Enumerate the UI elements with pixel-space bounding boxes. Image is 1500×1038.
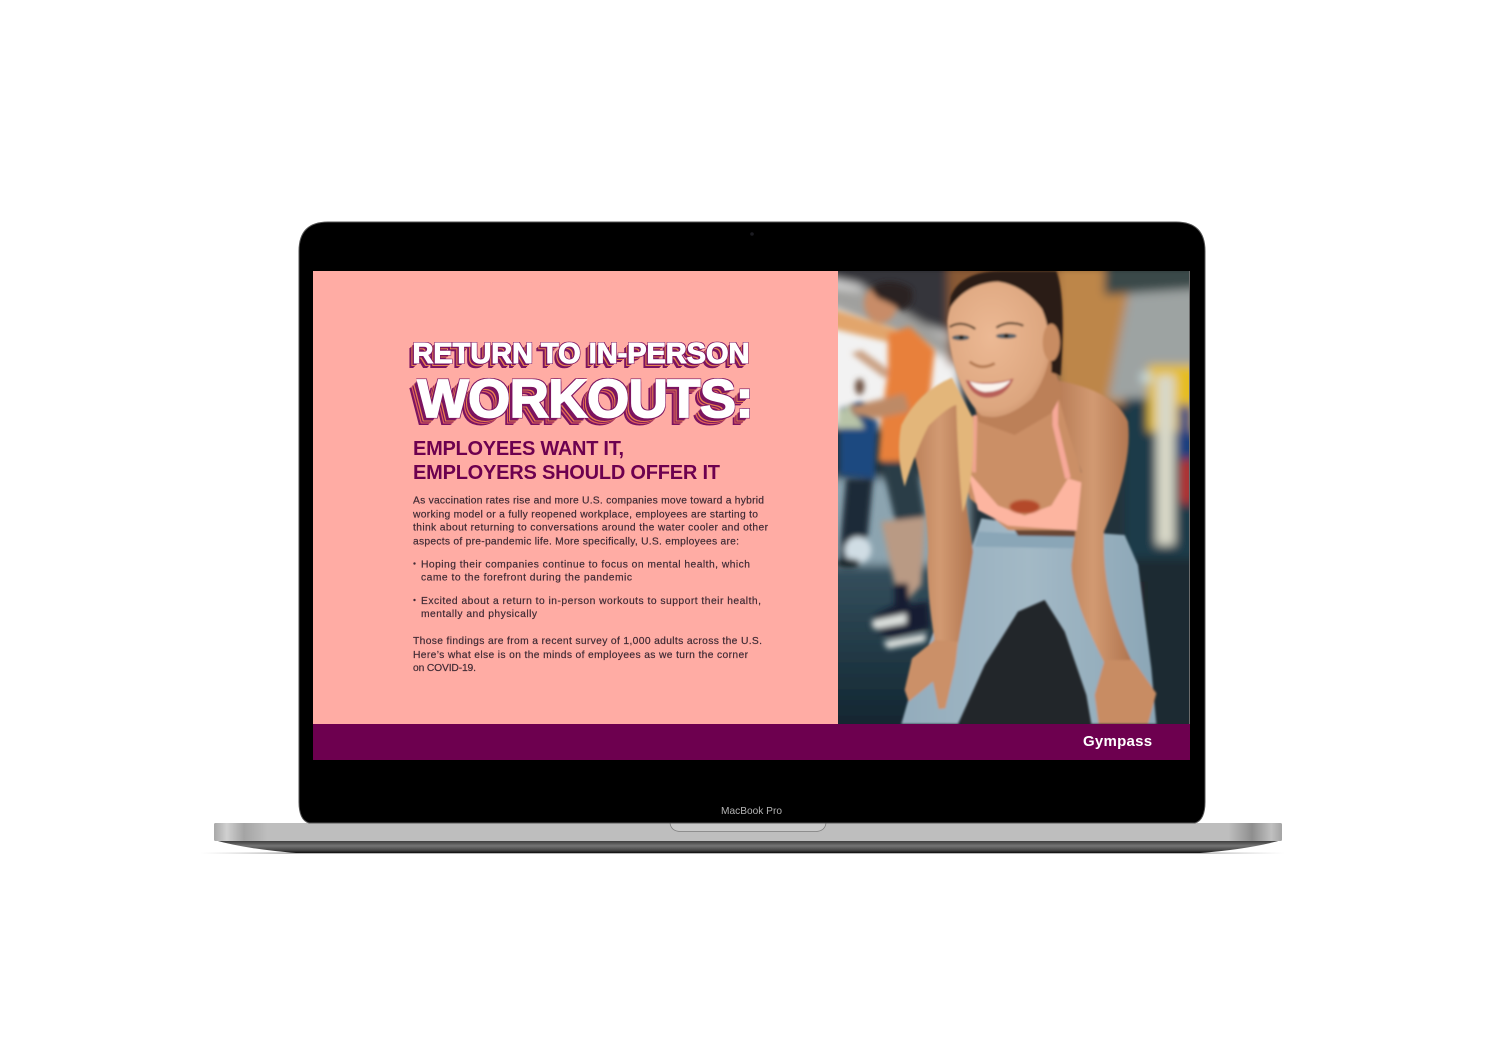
- closing paragraph: Those findings are from a recent survey of 1,000 adults across the U.S.: [413, 636, 762, 647]
- woman nose: [970, 362, 995, 367]
- photo far background person: [835, 379, 877, 568]
- photo blurred man in orange: [831, 282, 935, 649]
- bullet: in-person workouts: Excited about a return to in-person workouts to support their health,: [421, 596, 761, 607]
- laptop notch: [670, 823, 826, 832]
- bullet: mental health: [413, 560, 750, 584]
- bullet: in-person workouts: mentally and physically: [421, 609, 538, 620]
- subheading: EMPLOYERS SHOULD OFFER IT: [413, 462, 720, 484]
- laptop model label: MacBook Pro: [721, 805, 782, 817]
- panel: gym photo of smiling woman: [838, 271, 1190, 724]
- intro paragraph: As vaccination rates rise and more U.S. companies move toward a hybrid: [413, 496, 764, 506]
- laptop lid: [299, 222, 1205, 823]
- subheading: [413, 438, 720, 484]
- woman right arm: [1055, 380, 1131, 663]
- woman mouth: [966, 378, 1014, 398]
- woman eyebrows and eyes: [950, 323, 1023, 329]
- camera: [750, 232, 754, 236]
- laptop upper base: [214, 823, 1282, 841]
- bullet: mental health: Hoping their companies continue to focus on mental health, which: [421, 560, 750, 570]
- laptop shadow: [200, 852, 1285, 854]
- photo background: [825, 265, 1205, 732]
- subheading: EMPLOYEES WANT IT,: [413, 438, 624, 460]
- intro paragraph: working model or a fully reopened workplace, employees are starting to: [412, 510, 758, 520]
- title line 2: WORKOUTS:: [418, 369, 753, 429]
- woman face: [947, 278, 1052, 417]
- woman sports bra: [968, 472, 1081, 531]
- intro paragraph: think about returning to conversations around the water cooler and other: [413, 522, 769, 534]
- body text: [412, 496, 769, 674]
- woman hands: [905, 640, 958, 709]
- panel: screen pink background: [313, 271, 838, 724]
- closing paragraph: on COVID-19.: [413, 663, 476, 674]
- laptop lower base: [214, 840, 1282, 853]
- intro paragraph: [412, 496, 769, 548]
- closing paragraph: [413, 636, 762, 674]
- bullet: mental health: came to the forefront during the pandemic: [421, 572, 632, 584]
- woman ear: [1043, 324, 1060, 361]
- woman neck: [973, 355, 1062, 435]
- title line 1: RETURN TO IN-PERSON: [412, 338, 749, 370]
- photo woman: [899, 271, 1156, 724]
- photo right edge: [1189, 271, 1190, 724]
- bullet: in-person workouts: [413, 596, 761, 620]
- woman torso: [953, 392, 1083, 535]
- logo: Gympass: Gympass: [1083, 733, 1152, 750]
- woman hair: [949, 271, 1063, 376]
- woman leggings: [901, 518, 1156, 724]
- panel: bottom brand bar: [313, 724, 1190, 760]
- woman left arm: [906, 381, 973, 643]
- woman ponytail: [899, 378, 973, 512]
- intro paragraph: aspects of pre-pandemic life. More specifically, U.S. employees are:: [413, 536, 739, 548]
- closing paragraph: Here’s what else is on the minds of employees as we turn the corner: [413, 650, 749, 661]
